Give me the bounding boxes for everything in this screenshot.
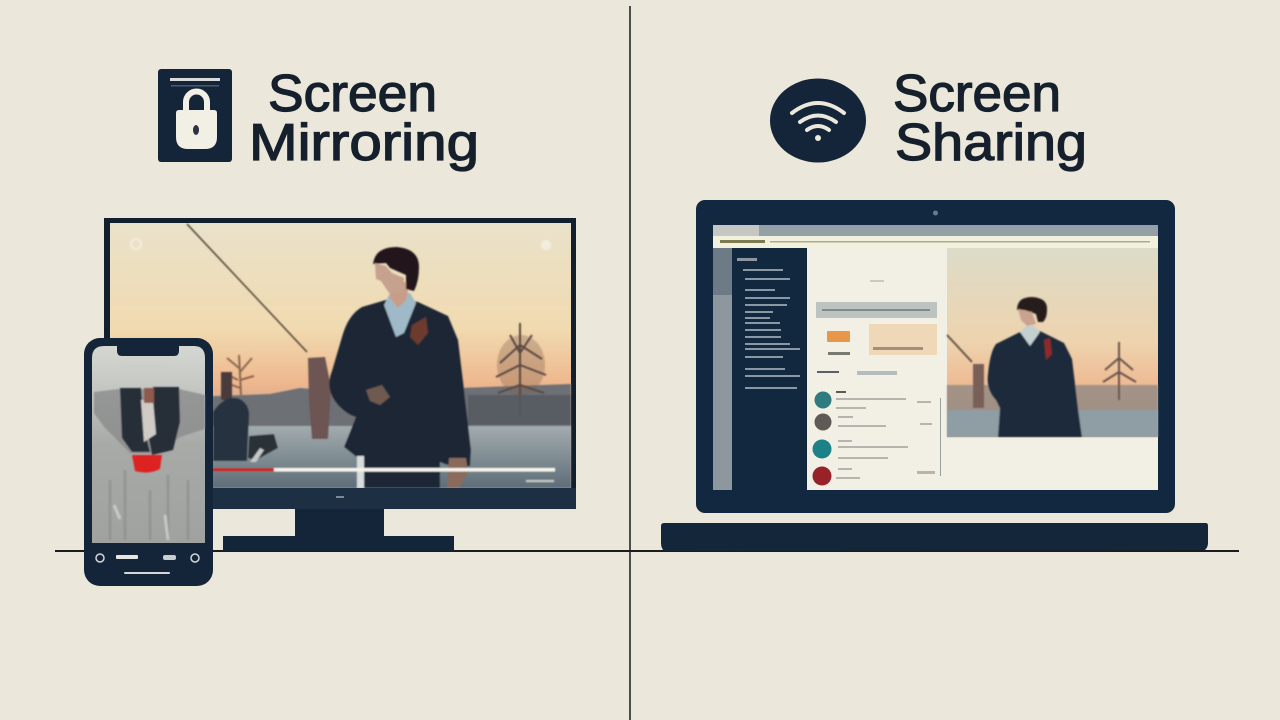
- corner glyphs: [131, 239, 141, 249]
- heading: Screen Mirroring: [249, 65, 479, 172]
- laptop base: [661, 523, 1208, 551]
- panel: screen sharing heading: [770, 65, 1087, 172]
- laptop lid: [696, 200, 1175, 513]
- browser address bar: [713, 236, 1158, 248]
- phone video thumbnail: [94, 387, 205, 540]
- centre divider: [629, 6, 631, 720]
- monitor frame: [104, 218, 576, 509]
- laptop screen: [713, 225, 1158, 490]
- phone: [84, 338, 213, 586]
- chat panel: [807, 248, 947, 490]
- pole: [187, 224, 307, 352]
- tree stump: [308, 357, 331, 439]
- man: [329, 247, 471, 488]
- phone controls: [96, 554, 199, 574]
- laptop camera: [933, 210, 938, 216]
- left tree: [224, 355, 254, 395]
- monitor: [104, 218, 576, 551]
- seated figure: [213, 398, 249, 461]
- ground line: [55, 550, 1239, 552]
- laptop: [661, 200, 1208, 551]
- chat avatars: [812, 392, 832, 486]
- progress bar: [212, 468, 555, 472]
- heading: Screen Sharing: [893, 65, 1087, 172]
- phone notch: [117, 346, 179, 356]
- monitor video scene: [110, 223, 571, 488]
- panel: screen mirroring heading: [158, 65, 479, 172]
- icon: wifi badge: [770, 78, 866, 162]
- icon: padlock on document: [158, 69, 232, 162]
- heading: Screen Sharing: Sharing: [895, 114, 1087, 172]
- heading: Screen Mirroring: Screen: [268, 65, 437, 123]
- heading: Screen Sharing: Screen: [893, 65, 1061, 123]
- sidebar rail: [713, 248, 732, 490]
- right tree: [497, 335, 545, 395]
- heading: Screen Mirroring: Mirroring: [249, 114, 479, 172]
- monitor stand: [223, 505, 454, 551]
- laptop video scene: [947, 248, 1158, 437]
- sidebar: [732, 248, 807, 490]
- browser tab bar: [713, 225, 1158, 236]
- phone screen: [92, 346, 205, 543]
